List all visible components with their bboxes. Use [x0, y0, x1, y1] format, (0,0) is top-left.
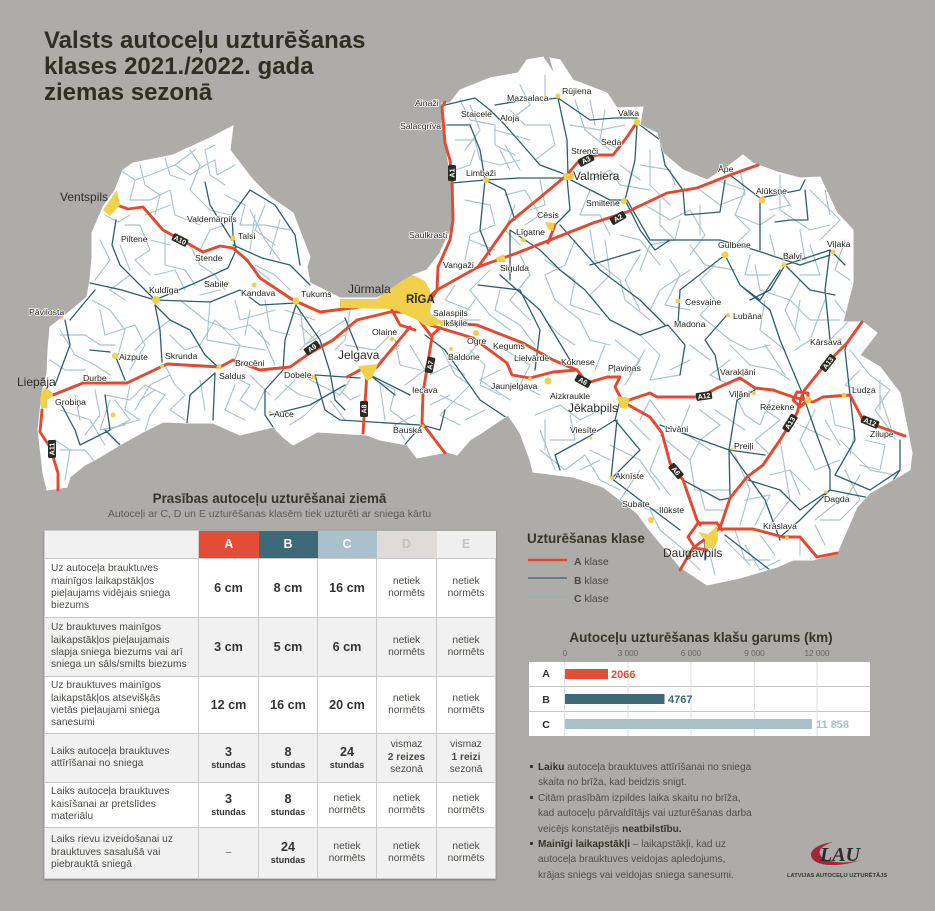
chart values and categories — [542, 668, 849, 731]
requirements table: stundas — [211, 760, 246, 770]
town labels: Auce — [274, 409, 294, 419]
town labels: Tukums — [301, 289, 332, 299]
road number shields: A2 — [613, 214, 624, 224]
town labels: Sigulda — [500, 263, 529, 273]
town labels: Aknīste — [615, 471, 644, 481]
road number shields: A8 — [362, 404, 368, 413]
requirements table: 24 — [340, 744, 354, 758]
town labels: Pāvilosta — [29, 307, 64, 317]
title: klases 2021./2022. gada — [44, 53, 314, 80]
town labels: Kuldīga — [149, 285, 179, 295]
requirements table: sezonā — [390, 764, 423, 775]
requirements table: netiek — [452, 693, 480, 704]
town labels: Durbe — [83, 373, 107, 383]
requirements table: attīrīšanai no sniega — [51, 758, 143, 769]
bar chart: length of road classes — [529, 630, 870, 736]
table heading: Prasības autoceļu uzturēšanai ziemā — [153, 491, 386, 506]
town labels: Saulkrasti — [409, 230, 447, 240]
requirements table: Laiks rievu izveidošanai uz — [51, 834, 173, 845]
requirements table: netiek — [452, 635, 480, 646]
requirements table: normēts — [448, 853, 484, 864]
requirements table: 2 reizes — [388, 752, 425, 763]
town labels: Ludza — [852, 385, 876, 395]
town labels: Valka — [618, 108, 639, 118]
requirements table: netiek — [333, 793, 361, 804]
town labels: Talsi — [238, 231, 255, 241]
requirements table: Laiks autoceļa brauktuves — [51, 746, 170, 757]
requirements table: netiek — [452, 841, 480, 852]
requirements table: normēts — [388, 705, 425, 716]
requirements table: normēts — [388, 588, 425, 599]
town labels: Krāslava — [763, 521, 797, 531]
notes: kad autoceļu pārvaldītājs vai uzturēšanas darba — [538, 808, 752, 819]
requirements table: netiek — [333, 841, 361, 852]
notes — [530, 762, 752, 881]
logo: LAU: LAU — [819, 844, 862, 866]
requirements table: Uz brauktuves mainīgos — [51, 680, 161, 691]
bar A — [565, 669, 608, 679]
table heading — [108, 491, 431, 520]
town labels: Gulbene — [718, 240, 751, 250]
road number shields: A3 — [581, 156, 592, 166]
requirements table: D — [402, 537, 411, 551]
chart axis labels: 0 — [563, 649, 568, 658]
requirements table: brauktuves sasalušā vai — [51, 847, 160, 858]
town labels: Ventspils — [60, 190, 108, 204]
requirements table: stundas — [271, 760, 305, 770]
requirements table: laikapstākļos pieļaujamais — [51, 635, 170, 646]
title: Valsts autoceļu uzturēšanas — [44, 27, 365, 54]
class B roads — [55, 98, 900, 570]
requirements table: normēts — [448, 805, 484, 816]
legend: road classes: Uzturēšanas klase — [527, 531, 645, 546]
town labels: Grobiņa — [55, 397, 86, 407]
town labels: Staicele — [461, 109, 492, 119]
logo: LAU: LATVIJAS AUTOCEĻU UZTURĒTĀJS — [787, 872, 887, 879]
requirements table: vismaz — [391, 739, 422, 750]
town labels: RĪGA — [406, 294, 435, 306]
town labels: Viesīte — [570, 425, 597, 435]
requirements table: Uz autoceļa brauktuves — [51, 563, 158, 574]
requirements table: normēts — [329, 853, 365, 864]
town labels: Cēsis — [537, 210, 559, 220]
map land silhouette — [38, 57, 912, 585]
requirements table: materiālu — [51, 811, 93, 822]
town labels: Ainaži — [415, 98, 439, 108]
town labels: Kandava — [241, 288, 275, 298]
notes: veicējs konstatējis neatbilstību. — [538, 824, 682, 835]
town labels: Daugavpils — [663, 546, 722, 560]
requirements table: 16 cm — [329, 581, 365, 595]
town labels: Stende — [195, 253, 223, 263]
town labels: Salacgrīva — [400, 121, 441, 131]
notes: skaita no brīža, kad beidzis snigt. — [538, 777, 687, 788]
requirements table: 24 — [281, 840, 295, 854]
town labels: Saldus — [219, 371, 246, 381]
requirements table: biezums — [51, 600, 89, 611]
requirements table: netiek — [393, 793, 420, 804]
requirements table: 6 cm — [214, 581, 243, 595]
requirements table: normēts — [329, 805, 365, 816]
town labels: Jūrmala — [348, 282, 391, 296]
town labels: Aizpute — [119, 352, 148, 362]
requirements table: 3 — [225, 792, 232, 806]
town labels: Seda — [601, 137, 621, 147]
requirements table: sezonā — [450, 764, 482, 775]
chart values and categories: 4767 — [668, 694, 692, 706]
requirements table: 16 cm — [270, 698, 306, 712]
town labels: Valmiera — [573, 169, 620, 183]
town labels: Jelgava — [338, 348, 380, 362]
town labels: Subate — [622, 499, 650, 509]
town labels: Ķegums — [493, 341, 526, 351]
town labels: Olaine — [372, 327, 397, 337]
chart values and categories: 11 858 — [816, 719, 849, 731]
town labels: Ogre — [467, 336, 486, 346]
notes: Mainīgi laikapstākļi – laikapstākļi, kad uz — [538, 839, 726, 850]
requirements table: kaisīšanai ar pretslīdes — [51, 799, 156, 810]
town labels: Dobele — [284, 370, 312, 380]
road number shields: A1 — [450, 168, 456, 177]
notes: Citām prasībām izpildes laika skaitu no brīža, — [538, 793, 741, 804]
town labels: Liepāja — [17, 375, 56, 389]
requirements table: 3 — [225, 744, 232, 758]
requirements table — [44, 530, 496, 879]
requirements table: Laiks autoceļa brauktuves — [51, 786, 170, 797]
bar C — [565, 719, 812, 729]
notes: krājas sniegs vai veidojas sniega sanesumi. — [538, 870, 734, 881]
chart axis labels: 9 000 — [744, 649, 765, 658]
town labels: Aloja — [500, 113, 519, 123]
title — [44, 27, 365, 106]
requirements table: 12 cm — [211, 698, 246, 712]
town labels: Līvāni — [665, 424, 688, 434]
requirements table: normēts — [388, 853, 425, 864]
requirements table: stundas — [211, 806, 246, 816]
town labels: Lielvārde — [514, 353, 549, 363]
town labels: Pļaviņas — [608, 363, 641, 373]
chart values and categories: A — [542, 668, 550, 680]
requirements table: pieļaujams vidējais sniega — [51, 588, 170, 599]
requirements table: netiek — [452, 793, 480, 804]
town labels: Mazsalaca — [507, 93, 549, 103]
town labels: Aizkraukle — [550, 391, 590, 401]
requirements table: 6 cm — [333, 640, 361, 654]
town labels: Valdemārpils — [187, 214, 237, 224]
chart axis labels: 3 000 — [618, 649, 639, 658]
town labels: Varakļāni — [720, 367, 756, 377]
legend: road classes: B klase — [574, 576, 609, 587]
requirements table: E — [462, 537, 470, 551]
town labels: Āpe — [718, 164, 734, 174]
chart values and categories: B — [542, 694, 550, 706]
requirements table: Uz brauktuves mainīgos — [51, 622, 161, 633]
chart axis labels — [563, 649, 830, 658]
class C roads — [50, 75, 895, 575]
chart axis labels: 6 000 — [681, 649, 702, 658]
town labels: Vangaži — [443, 260, 474, 270]
requirements table: A — [224, 537, 233, 551]
requirements table: 3 cm — [214, 640, 243, 654]
legend: road classes: A klase — [574, 557, 609, 568]
town labels: Kārsava — [810, 337, 842, 347]
town labels: Zilupe — [870, 429, 894, 439]
chart title: Autoceļu uzturēšanas klašu garums (km) — [569, 630, 833, 645]
requirements table: normēts — [448, 588, 484, 599]
requirements table: normēts — [448, 647, 484, 658]
requirements table: netiek — [393, 693, 420, 704]
requirements table: – — [226, 847, 231, 858]
table heading: Autoceļi ar C, D un E uzturēšanas klasēm tiek uzturēti ar sniega kārtu — [108, 508, 431, 520]
road number shields: A10 — [172, 235, 187, 247]
town labels: Madona — [674, 319, 706, 329]
requirements table: 20 cm — [329, 698, 365, 712]
requirements table: sanesumi — [51, 717, 95, 728]
town labels: Skrunda — [165, 351, 198, 361]
town labels: Cesvaine — [685, 297, 721, 307]
town labels: Rūjiena — [562, 86, 592, 96]
road number shields: A13 — [822, 356, 836, 371]
bar B — [565, 694, 664, 704]
requirements table: 1 reizi — [452, 752, 480, 763]
requirements table: sniega un sāls/smilts biezums — [51, 659, 187, 670]
town labels: Iecava — [412, 385, 438, 395]
road number shields: A6 — [577, 377, 588, 387]
town labels: Sabile — [204, 279, 228, 289]
requirements table: 5 cm — [274, 640, 302, 654]
town labels: Balvi — [783, 251, 802, 261]
town labels: Bauska — [393, 425, 422, 435]
requirements table: 8 cm — [274, 581, 302, 595]
requirements table: netiek — [393, 841, 420, 852]
requirements table: netiek — [393, 576, 420, 587]
town labels: Strenči — [571, 146, 598, 156]
road number shields: A7 — [427, 360, 435, 370]
town labels: Līgatne — [516, 227, 545, 237]
requirements table: 8 — [284, 792, 292, 806]
town labels: Jēkabpils — [568, 401, 618, 415]
town labels: Smiltene — [586, 198, 620, 208]
requirements table: normēts — [388, 647, 425, 658]
chart values and categories: C — [542, 719, 550, 731]
requirements table: piebrauktā sniegā — [51, 859, 132, 870]
town labels: Salaspils — [433, 308, 468, 318]
road number shields: A13 — [784, 416, 797, 431]
road number shields: A12 — [862, 417, 877, 429]
town labels: Piltene — [121, 234, 148, 244]
class A roads — [40, 102, 905, 570]
requirements table: vismaz — [450, 739, 482, 750]
requirements table: netiek — [452, 576, 480, 587]
requirements table: slapja sniega biezums vai arī — [51, 647, 183, 658]
town labels: Dagda — [824, 494, 850, 504]
town labels: Lubāna — [733, 311, 762, 321]
town labels: Rēzekne — [760, 402, 794, 412]
town labels: Viļāni — [729, 389, 750, 399]
requirements table: stundas — [330, 760, 364, 770]
legend: road classes — [527, 531, 645, 605]
road number shields — [48, 153, 880, 480]
town labels: Alūksne — [756, 186, 787, 196]
requirements table: normēts — [448, 705, 484, 716]
requirements table: stundas — [271, 854, 305, 864]
notes: autoceļa brauktuves veidojas apledojums, — [538, 854, 725, 865]
requirements table: vietās pieļaujami sniega — [51, 705, 160, 716]
town labels: Baldone — [448, 352, 480, 362]
road number shields: A6 — [670, 466, 681, 477]
requirements table: normēts — [388, 805, 425, 816]
town labels — [17, 86, 894, 560]
town labels: Jaunjelgava — [491, 381, 538, 391]
legend: road classes: C klase — [574, 594, 609, 605]
town labels: Viļaka — [827, 239, 851, 249]
town labels: Limbaži — [466, 168, 496, 178]
requirements table: C — [342, 537, 352, 551]
requirements table: netiek — [393, 635, 420, 646]
title: ziemas sezonā — [44, 79, 212, 106]
requirements table: mainīgos laikapstākļos — [51, 576, 154, 587]
road number shields: A12 — [697, 393, 711, 401]
logo: LAU — [787, 842, 887, 879]
town labels: Brocēni — [235, 358, 265, 368]
town labels: Koknese — [561, 357, 595, 367]
road number shields: A9 — [307, 343, 318, 354]
chart values and categories: 2066 — [611, 669, 635, 681]
notes: Laiku autoceļa brauktuves attīrīšanai no sniega — [538, 762, 751, 773]
town labels: Ikšķile — [443, 318, 467, 328]
chart axis labels: 12 000 — [804, 649, 830, 658]
requirements table: stundas — [271, 806, 305, 816]
chart panel — [529, 662, 870, 736]
requirements table: 8 — [284, 744, 292, 758]
requirements table: B — [283, 537, 293, 551]
road number shields: A11 — [50, 443, 56, 455]
requirements table: laikapstākļos atsevišķās — [51, 693, 160, 704]
town labels: Preiļi — [734, 441, 753, 451]
towns and cities — [40, 94, 846, 548]
town labels: Ilūkste — [659, 505, 684, 515]
